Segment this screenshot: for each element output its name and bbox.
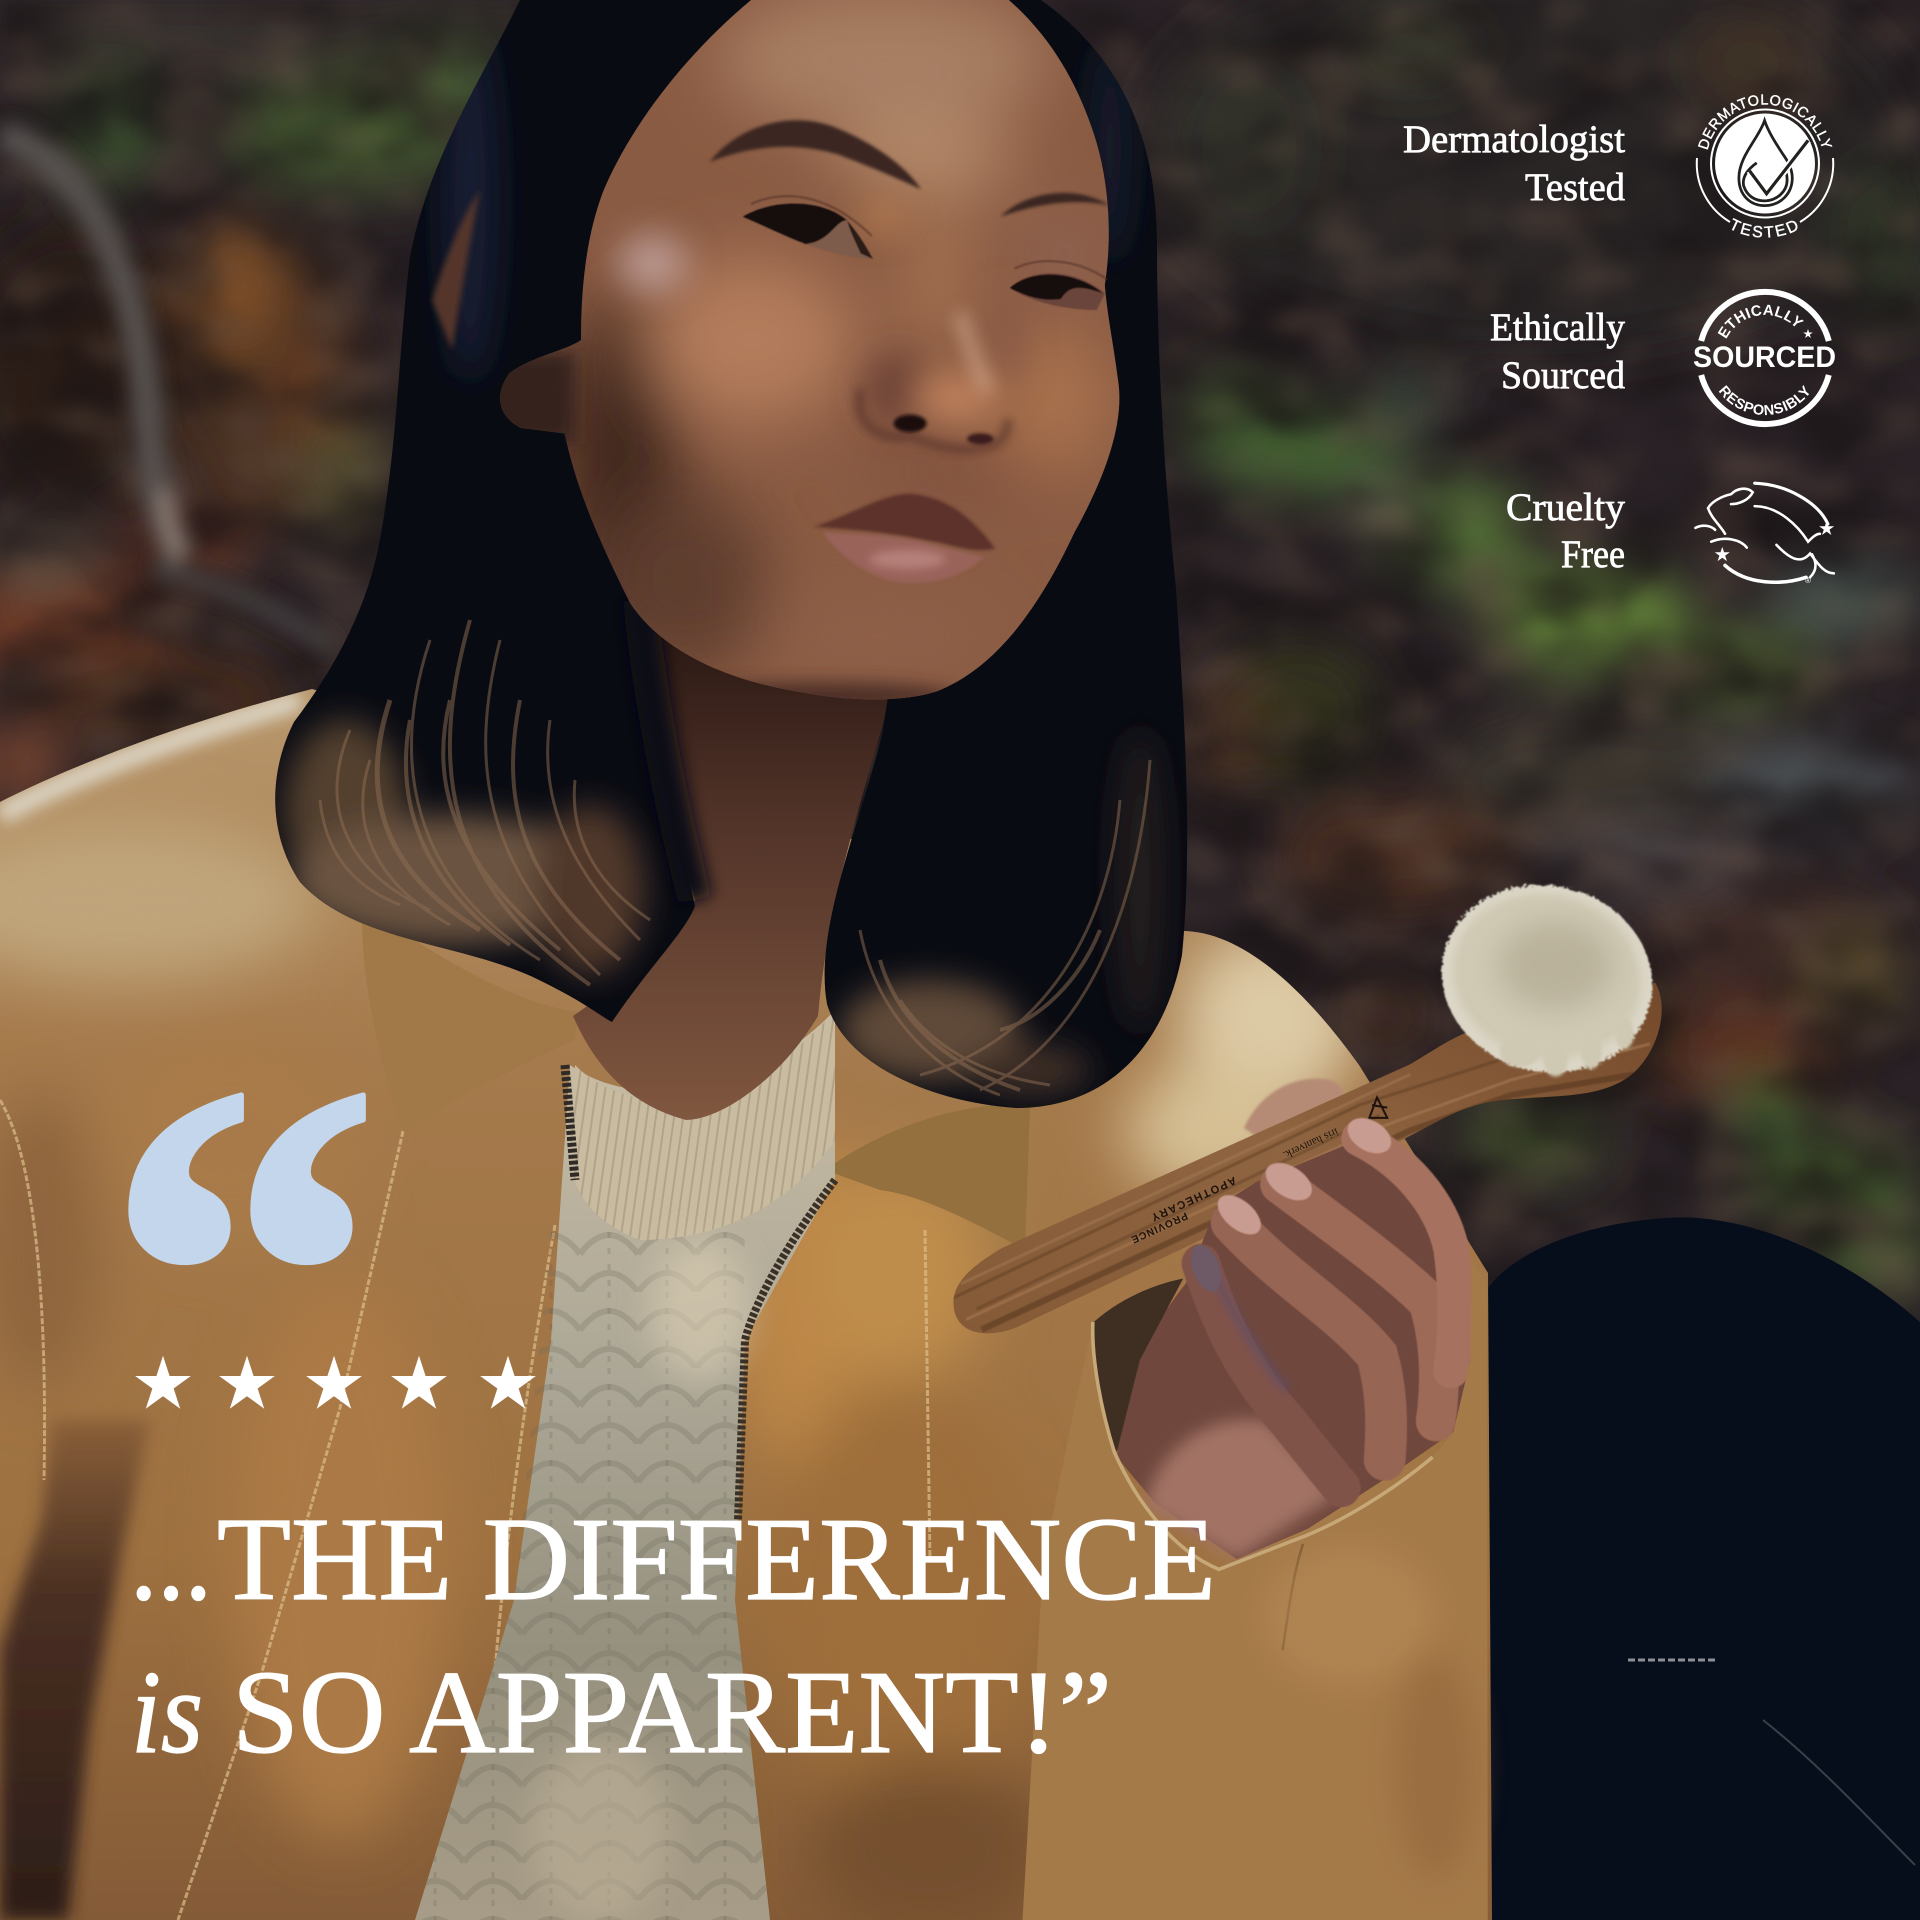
badge: dermatologically tested: DERMATOLOGICALLY (1698, 94, 1832, 150)
photo: goat-hair bristles (1420, 861, 1673, 1096)
photo: wooden brush handle (951, 983, 1662, 1333)
headline quote: THE DIFFERENCE (217, 1493, 1216, 1625)
photo: black hair (275, 0, 1187, 1108)
icon: eyebrows (710, 120, 1110, 217)
icon: eyes (743, 196, 1108, 310)
label: dermatologist tested: Dermatologist (1403, 118, 1625, 161)
photo: jacket cuff (1022, 1263, 1488, 1920)
brush engraving text (1129, 1097, 1387, 1245)
badge: dermatologically tested (1696, 94, 1834, 238)
brush engraving text: PROVINCE (1129, 1210, 1189, 1245)
label: ethically sourced: Ethically (1490, 306, 1625, 349)
badge: ethically sourced responsibly: SOURCED (1693, 341, 1836, 374)
headline quote: SO APPARENT!” (232, 1646, 1112, 1778)
badge: dermatologically tested: TESTED (1732, 218, 1798, 238)
icon: lips (814, 494, 995, 583)
badge: ethically sourced responsibly (1693, 288, 1836, 428)
badge: leaping bunny (1695, 483, 1834, 585)
label: cruelty free: Cruelty (1506, 486, 1626, 529)
label: ethically sourced (1490, 306, 1625, 397)
brush engraving text: iris hantverk. (1281, 1125, 1340, 1161)
label: dermatologist tested (1403, 118, 1625, 209)
label: cruelty free (1506, 486, 1626, 576)
photo: tan jacket (0, 689, 1492, 1920)
photo: cable-knit sweater (415, 1010, 835, 1920)
brush engraving text: APOTHECARY (1148, 1174, 1238, 1224)
headline quote (130, 1493, 1216, 1778)
badge: leaping bunny: ® (1805, 576, 1811, 585)
headline quote: is (131, 1646, 203, 1778)
photo: left jacket collar (362, 905, 578, 1132)
fingernails (1185, 1111, 1397, 1296)
label: ethically sourced: Sourced (1501, 354, 1625, 397)
photo: right jacket collar (825, 1104, 1030, 1250)
photo: hand gripping brush (1117, 1111, 1470, 1559)
icon: large quotation mark: “ (104, 970, 382, 1585)
icon: nostrils (894, 415, 993, 444)
photo: face (482, 0, 1119, 711)
headline quote: ... (130, 1493, 212, 1625)
photo: neck (573, 600, 900, 1120)
label: cruelty free: Free (1561, 533, 1625, 576)
label: dermatologist tested: Tested (1525, 166, 1625, 209)
rating: five stars (135, 1356, 536, 1409)
photo: thumb behind brush (1244, 1079, 1344, 1160)
photo: navy trousers (1457, 1217, 1920, 1920)
badge: ethically sourced responsibly: RESPONSIBLY (1718, 385, 1809, 416)
badge: ethically sourced responsibly: ETHICALLY (1718, 304, 1804, 338)
